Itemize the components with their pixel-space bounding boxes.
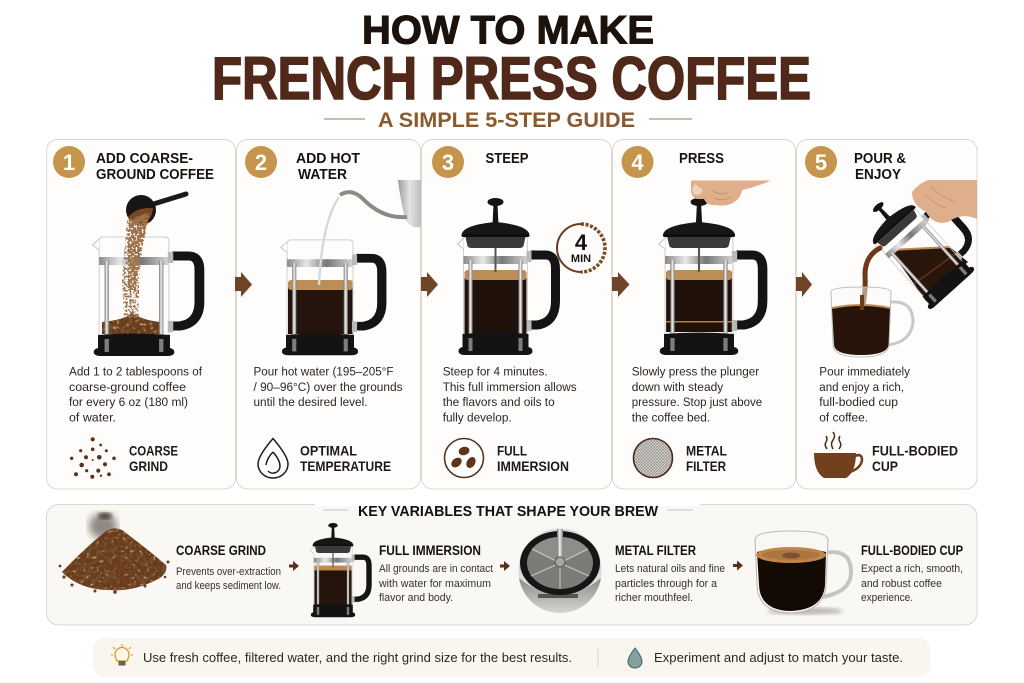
step heading: ENJOY [855, 167, 901, 183]
subtitle: A SIMPLE 5-STEP GUIDE [378, 109, 635, 132]
text: full-bodied cup: experience. [861, 592, 913, 604]
instruction text: Slowly press the plunger [632, 364, 759, 378]
step heading: POUR & [854, 151, 906, 167]
tip text: Experiment and adjust to match your taste. [654, 650, 903, 665]
arrow [612, 272, 630, 297]
step number 5 [805, 146, 837, 178]
illustration: hand pressing plunger [659, 180, 771, 355]
icon: coarse grind dots [70, 437, 116, 479]
step heading [854, 151, 906, 183]
step number 2: 2 [255, 150, 267, 175]
icon label: FILTER [686, 459, 726, 474]
icon: water drop [258, 438, 288, 478]
instruction text: for every 6 oz (180 ml) [69, 395, 188, 409]
icon label [686, 444, 727, 474]
text: coarse grind: COARSE GRIND [176, 543, 266, 558]
text: full immersion: with water for maximum [378, 578, 491, 590]
step heading: ADD HOT [296, 151, 360, 167]
tip bar [93, 638, 930, 677]
icon label: METAL [686, 444, 727, 458]
icon label: COARSE [129, 444, 178, 458]
instruction text: the coffee bed. [632, 410, 710, 424]
icon label: FULL [497, 444, 527, 458]
icon label: FULL-BODIED [872, 444, 958, 458]
step heading [96, 151, 214, 183]
panel: step 5 pour and enjoy [796, 140, 990, 489]
text: full immersion: FULL IMMERSION [379, 543, 481, 558]
text: metal filter: Lets natural oils and fine [615, 563, 725, 575]
icon: coffee beans in circle [444, 438, 484, 478]
icon label [300, 444, 391, 474]
instruction text: down with steady [632, 380, 724, 394]
panel: step 2 add hot water [236, 140, 421, 489]
icon label: GRIND [129, 459, 168, 474]
instruction text: full-bodied cup [819, 395, 898, 409]
text: full-bodied cup: and robust coffee [861, 578, 942, 590]
text: metal filter: particles through for a [615, 578, 717, 590]
arrow [733, 560, 743, 570]
step heading: GROUND COFFEE [96, 167, 214, 183]
illustration: kettle pouring water into press [281, 180, 421, 355]
text: coarse grind: Prevents over-extraction [176, 566, 281, 578]
step heading: PRESS [679, 151, 724, 167]
instruction text: Pour immediately [819, 364, 911, 378]
timer: 4 min: 4 [575, 230, 588, 255]
icon label: CUP [872, 459, 898, 474]
instruction text: and enjoy a rich, [819, 380, 904, 394]
step number 2 [245, 146, 277, 178]
instruction text: Add 1 to 2 tablespoons of [69, 364, 203, 378]
text: metal filter [615, 543, 725, 604]
image: french press [310, 523, 369, 617]
arrow [235, 272, 252, 297]
panel: key variables [46, 503, 977, 625]
text: metal filter: METAL FILTER [615, 543, 696, 558]
title [212, 8, 811, 132]
icon: metal filter [634, 438, 672, 478]
timer: 4 min [557, 224, 605, 272]
image: glass cup of coffee [755, 531, 851, 614]
instruction text [819, 364, 911, 424]
icon label: IMMERSION [497, 459, 569, 474]
text: metal filter: richer mouthfeel. [615, 592, 693, 604]
step heading: STEEP [486, 151, 529, 167]
text: coarse grind: and keeps sediment low. [176, 580, 281, 592]
step heading [296, 151, 360, 183]
step number 5: 5 [815, 150, 827, 175]
step number 1 [53, 146, 85, 178]
icon: coffee cup with steam [814, 432, 862, 478]
arrow [500, 561, 510, 571]
step number 3: 3 [442, 150, 454, 175]
instruction text: the flavors and oils to [443, 395, 555, 409]
text: full immersion: All grounds are in contact [379, 563, 493, 575]
title line: how to make: HOW TO MAKE [362, 8, 654, 52]
instruction text: Steep for 4 minutes. [443, 364, 548, 378]
panel: step 3 steep [422, 140, 612, 489]
section heading: KEY VARIABLES THAT SHAPE YOUR BREW [358, 503, 659, 520]
panel: step 1 add coarse-ground coffee [46, 140, 236, 489]
image: coffee grounds pile [59, 513, 170, 594]
instruction text: pressure. Stop just above [632, 395, 762, 409]
instruction text [443, 364, 577, 424]
instruction text: This full immersion allows [443, 380, 577, 394]
instruction text: fully develop. [443, 410, 512, 424]
step heading: ADD COARSE- [96, 151, 193, 167]
instruction text [254, 364, 402, 409]
instruction text: Pour hot water (195–205°F [254, 364, 394, 378]
step number 3 [432, 146, 464, 178]
instruction text [69, 364, 203, 424]
instruction text [632, 364, 762, 424]
text: full-bodied cup: FULL-BODIED CUP [861, 543, 963, 558]
step heading: WATER [298, 167, 348, 183]
timer: 4 min: MIN [571, 253, 591, 265]
icon label [872, 444, 958, 474]
text: coarse grind [176, 543, 281, 592]
text: full-bodied cup [861, 543, 963, 604]
icon: water drop [628, 648, 642, 668]
panel: step 4 press [612, 140, 796, 489]
text: full immersion: flavor and body. [379, 592, 453, 604]
icon label [129, 444, 178, 474]
illustration: scoop pouring grounds into press [93, 194, 199, 356]
arrow [289, 561, 299, 571]
arrow [796, 272, 812, 297]
illustration: french press steeping [458, 198, 556, 355]
icon label: TEMPERATURE [300, 459, 391, 474]
image: metal filter [518, 528, 602, 613]
illustration: pouring press into cup [831, 172, 990, 357]
instruction text: until the desired level. [254, 395, 368, 409]
title line: french press coffee: FRENCH PRESS COFFEE [212, 45, 811, 112]
text: full immersion [378, 543, 493, 604]
tip text: Use fresh coffee, filtered water, and the right grind size for the best results. [143, 650, 572, 665]
icon label: OPTIMAL [300, 444, 357, 458]
step number 1: 1 [63, 150, 75, 175]
instruction text: coarse-ground coffee [69, 380, 186, 394]
instruction text: / 90–96°C) over the grounds [254, 380, 402, 394]
instruction text: of water. [69, 410, 116, 424]
instruction text: of coffee. [819, 410, 868, 424]
text: full-bodied cup: Expect a rich, smooth, [861, 563, 963, 575]
step number 4 [622, 146, 654, 178]
icon label [497, 444, 569, 474]
step number 4: 4 [631, 150, 644, 175]
arrow [421, 272, 438, 297]
icon: light bulb [111, 644, 133, 666]
